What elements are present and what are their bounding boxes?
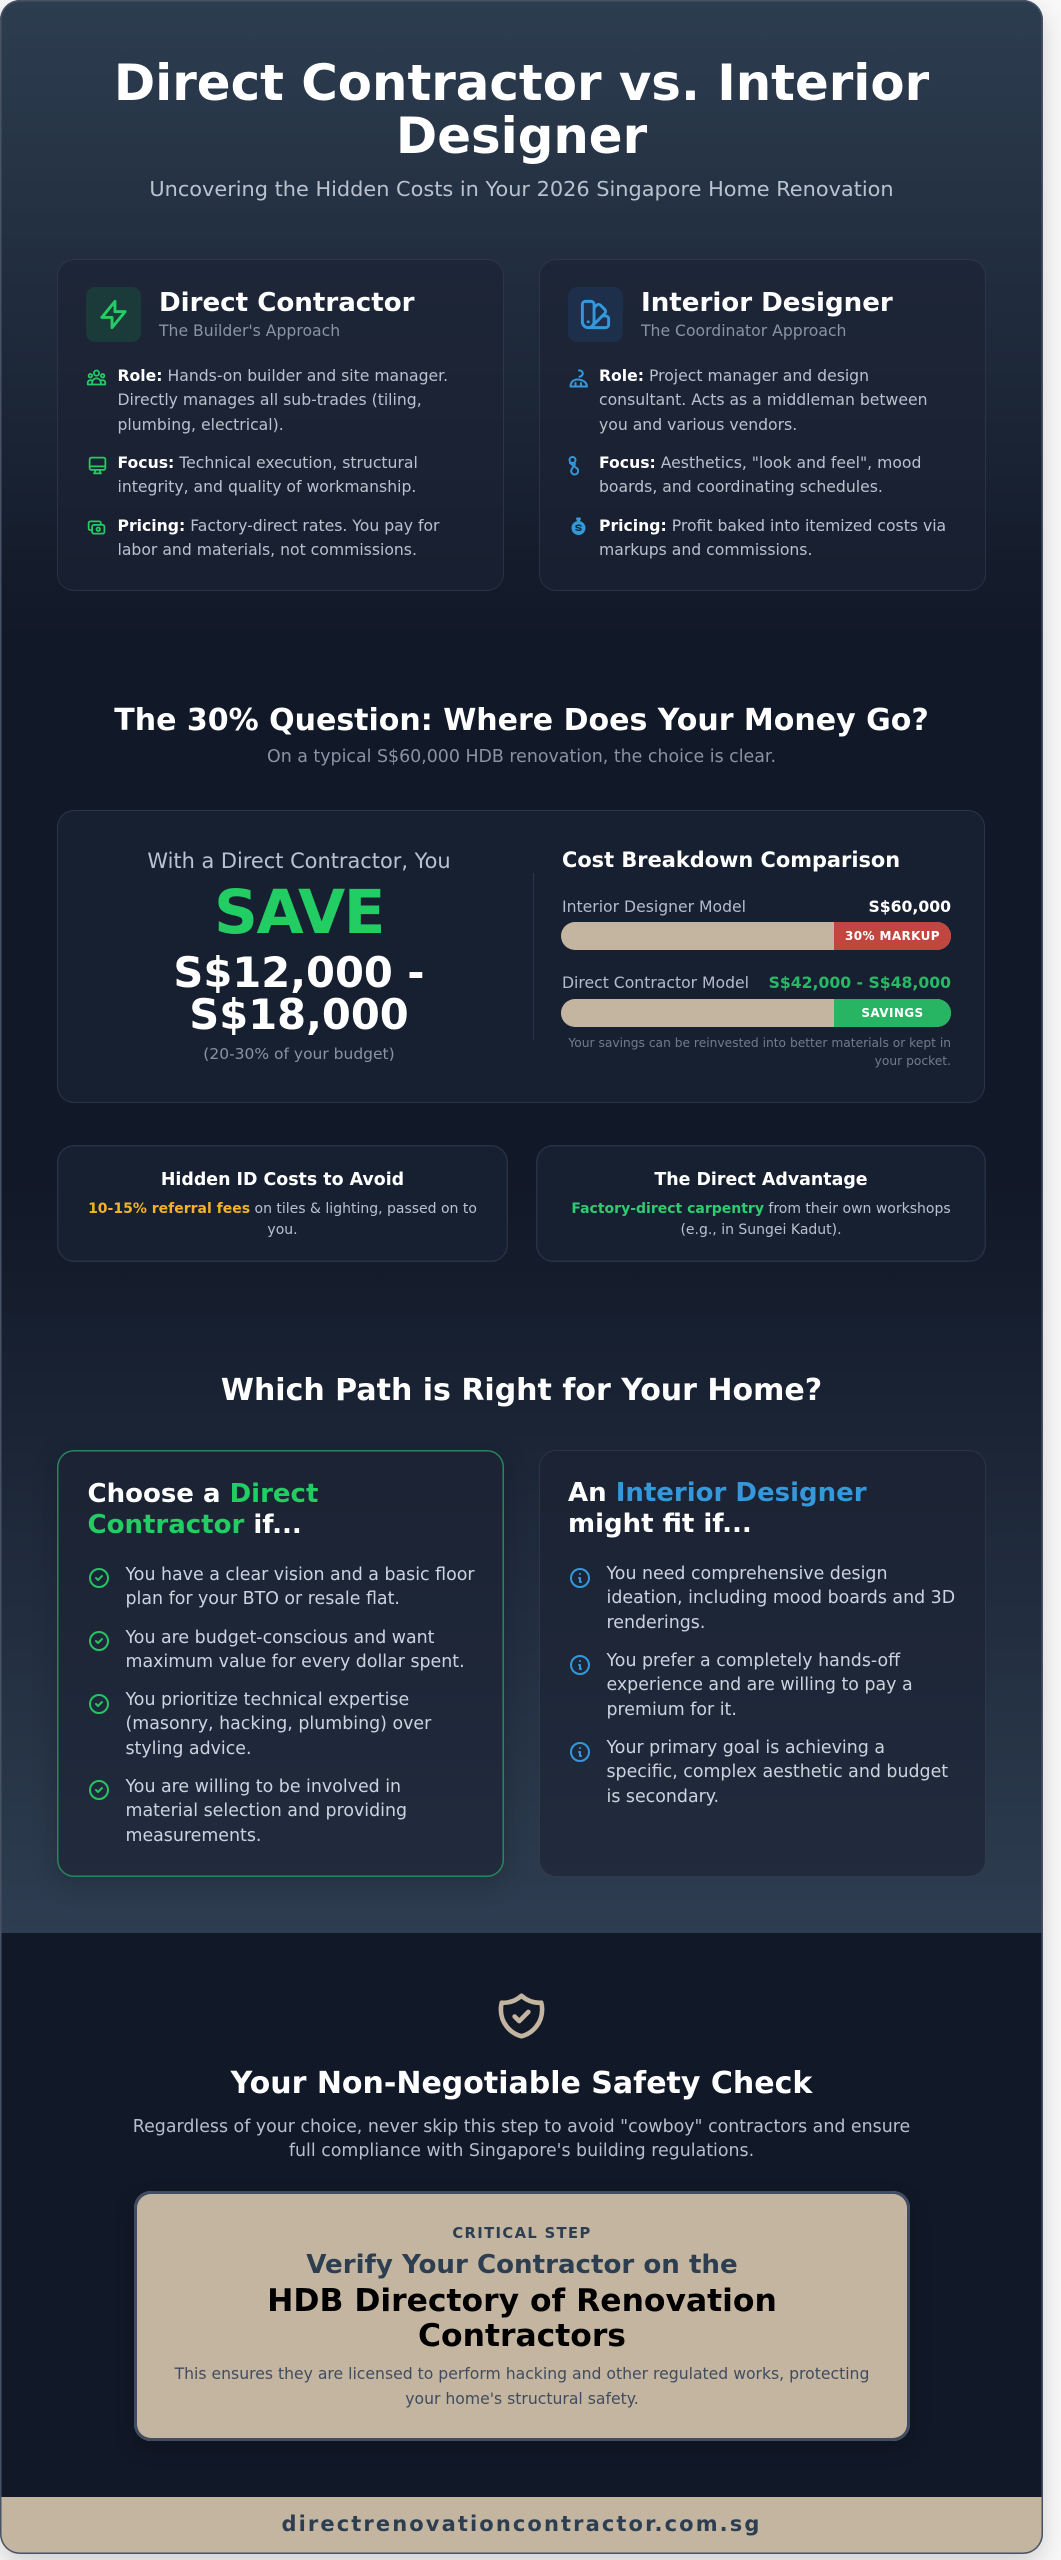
markup segment: 30% MARKUP — [845, 929, 940, 943]
panel title — [568, 1478, 867, 1539]
callout text — [571, 1200, 951, 1238]
heading: interior designer: Interior Designer — [641, 288, 893, 318]
callout text: 10-15% referral fees on tiles & lighting, passed on to — [88, 1200, 477, 1216]
icon: info — [570, 1568, 590, 1588]
text: pricing — [599, 516, 946, 559]
text: role — [599, 366, 927, 434]
label: critical step: CRITICAL STEP — [452, 2225, 592, 2242]
point one: You need comprehensive design — [606, 1564, 887, 1584]
text: pricing: Pricing: Factory-direct rates. You pay for — [118, 516, 439, 534]
safety text: Regardless of your choice, never skip this step to avoid "cowboy" contractors and ensure — [133, 2116, 910, 2136]
icon: lightning bolt — [86, 287, 141, 342]
bar: interior designer — [561, 922, 951, 950]
icon: check — [89, 1694, 109, 1714]
text: pricing: labor and materials, not commissions. — [118, 540, 417, 559]
icon: info — [570, 1655, 590, 1675]
panel title: might fit if... — [568, 1509, 752, 1539]
point three: Your primary goal is achieving a — [606, 1738, 885, 1758]
text: pricing: markups and commissions. — [599, 540, 812, 559]
subheading: The Builder's Approach — [159, 321, 340, 340]
savings segment — [834, 999, 951, 1027]
callout heading: Verify Your Contractor on the — [306, 2250, 738, 2280]
icon: check — [89, 1568, 109, 1588]
subheading: 30% question: On a typical S$60,000 HDB renovation, the choice is clear. — [267, 747, 776, 767]
icon: check — [89, 1780, 109, 1800]
text: role: Role: Hands-on builder and site manager. — [118, 366, 448, 385]
text: role: Role: Project manager and design — [599, 366, 869, 385]
icon: money bag — [572, 518, 586, 535]
heading: direct contractor: Direct Contractor — [159, 288, 415, 318]
text: role: Directly manages all sub-trades (tiling, — [118, 390, 422, 409]
icon: shield check — [498, 1993, 544, 2038]
save word: SAVE — [214, 877, 384, 948]
value: direct contractor total: S$42,000 - S$48,000 — [769, 973, 951, 992]
savings amount: S$18,000 — [189, 990, 409, 1039]
callout text — [174, 2364, 869, 2408]
heading: 30% question: The 30% Question: Where Does Your Money Go? — [114, 702, 929, 738]
text: role: plumbing, electrical). — [118, 415, 284, 434]
savings amount — [173, 948, 425, 1039]
text: role: consultant. Acts as a middleman between — [599, 390, 927, 409]
chart: cost breakdown — [561, 848, 951, 1068]
heading: which path: Which Path is Right for Your Home? — [221, 1373, 822, 1408]
savings summary — [147, 849, 451, 1063]
callout title: Hidden ID Costs to Avoid — [161, 1170, 404, 1190]
point four — [126, 1777, 407, 1846]
bar: direct contractor — [561, 999, 951, 1027]
panel: choose direct contractor — [57, 1450, 504, 1877]
markup segment — [834, 922, 951, 950]
point two: You are budget-conscious and want — [126, 1628, 434, 1648]
point two: premium for it. — [606, 1700, 737, 1720]
point one — [606, 1564, 955, 1633]
safety text — [133, 2116, 910, 2161]
icon: swatch — [568, 287, 623, 342]
callout: hidden costs — [57, 1145, 508, 1262]
panel: interior designer — [539, 259, 986, 591]
point one: renderings. — [606, 1613, 705, 1633]
directory name: HDB Directory of Renovation — [267, 2283, 777, 2319]
icon: check — [89, 1631, 109, 1651]
icon: team — [86, 370, 106, 386]
point two — [606, 1651, 913, 1720]
text: focus: Focus: Aesthetics, "look and feel", mood — [599, 452, 921, 472]
point three: specific, complex aesthetic and budget — [606, 1762, 948, 1782]
text: focus — [118, 452, 418, 496]
icon: cash — [88, 520, 106, 534]
point three: You prioritize technical expertise — [126, 1690, 409, 1710]
panel title: An Interior Designer — [568, 1478, 867, 1508]
panel: direct contractor — [57, 259, 504, 591]
callout text: your home's structural safety. — [405, 2389, 639, 2408]
point three: (masonry, hacking, plumbing) over — [126, 1714, 431, 1734]
footer url: directrenovationcontractor.com.sg — [282, 2512, 761, 2536]
text: role: you and various vendors. — [599, 415, 797, 434]
icon: consultant — [570, 369, 588, 388]
callout text — [88, 1200, 477, 1238]
text: role — [118, 366, 448, 434]
point one: You have a clear vision and a basic floor — [126, 1565, 475, 1585]
point three: is secondary. — [606, 1787, 719, 1807]
directory name: Contractors — [418, 2318, 626, 2354]
footer — [0, 2497, 1043, 2554]
text: focus: Focus: Technical execution, structural — [118, 452, 418, 472]
point three — [126, 1690, 432, 1759]
value: interior designer total: S$60,000 — [868, 897, 951, 916]
title: Direct Contractor vs. Interior — [114, 54, 929, 112]
point three: styling advice. — [126, 1739, 252, 1759]
point one — [126, 1565, 475, 1609]
text: pricing — [118, 516, 440, 559]
callout title: The Direct Advantage — [654, 1170, 868, 1190]
title — [114, 54, 930, 164]
lead-in text: With a Direct Contractor, You — [147, 849, 451, 873]
point four: material selection and providing — [126, 1801, 407, 1821]
safety text: full compliance with Singapore's building regulations. — [289, 2141, 754, 2161]
callout: critical step — [134, 2190, 910, 2441]
note — [568, 1036, 951, 1068]
point three — [606, 1738, 948, 1807]
note: your pocket. — [875, 1054, 951, 1068]
text: focus: integrity, and quality of workmanship. — [118, 477, 416, 496]
point two: You prefer a completely hands-off — [606, 1651, 900, 1671]
text: focus: boards, and coordinating schedules. — [599, 477, 883, 496]
panel title — [88, 1478, 318, 1540]
label: direct contractor model: Direct Contractor Model — [562, 973, 749, 992]
savings amount: S$12,000 - — [173, 948, 425, 997]
panel title: Choose a Direct — [88, 1478, 318, 1508]
label: interior designer model: Interior Designer Model — [562, 897, 746, 916]
point two: maximum value for every dollar spent. — [126, 1652, 465, 1672]
icon: desktop — [88, 456, 106, 474]
subheading: The Coordinator Approach — [641, 321, 846, 340]
safety heading: Your Non-Negotiable Safety Check — [231, 2066, 812, 2101]
point two: experience and are willing to pay a — [606, 1675, 913, 1695]
callout text: This ensures they are licensed to perform hacking and other regulated works, protecting — [175, 2364, 869, 2383]
callout text: you. — [267, 1222, 298, 1238]
panel: interior designer fit — [539, 1450, 986, 1877]
panel: safety section — [0, 1933, 1043, 2497]
title: Designer — [396, 106, 647, 164]
chart title: Cost Breakdown Comparison — [562, 848, 900, 872]
callout: direct advantage — [536, 1145, 986, 1262]
subtitle: Uncovering the Hidden Costs in Your 2026 Singapore Home Renovation — [149, 177, 894, 201]
panel title: Contractor if... — [88, 1510, 302, 1540]
note: Your savings can be reinvested into better materials or kept in — [568, 1036, 951, 1050]
point one: plan for your BTO or resale flat. — [126, 1589, 400, 1609]
panel: savings and cost breakdown — [57, 810, 985, 1103]
text: focus — [599, 452, 921, 496]
savings percentage: (20-30% of your budget) — [203, 1045, 395, 1063]
savings segment: SAVINGS — [861, 1006, 924, 1020]
directory name — [267, 2283, 777, 2354]
point two — [126, 1628, 465, 1672]
point one: ideation, including mood boards and 3D — [606, 1588, 955, 1608]
callout text: Factory-direct carpentry from their own workshops — [571, 1200, 951, 1216]
icon: design focus — [568, 456, 580, 476]
callout text: (e.g., in Sungei Kadut). — [680, 1222, 842, 1238]
point four: measurements. — [126, 1826, 261, 1846]
point four: You are willing to be involved in — [126, 1777, 401, 1797]
text: pricing: Pricing: Profit baked into itemized costs via — [599, 516, 946, 534]
icon: info — [570, 1742, 590, 1762]
